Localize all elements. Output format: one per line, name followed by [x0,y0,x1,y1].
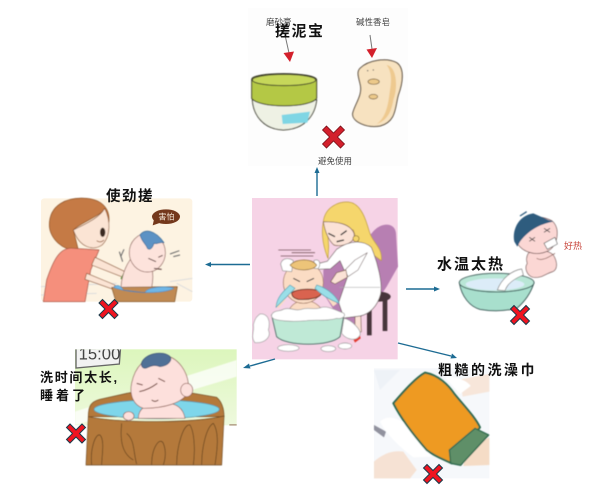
panel: water too hot [437,212,582,324]
icon: alkaline soap bar [353,60,402,126]
icon: red cross, long bath [66,424,86,443]
illustration: baby asleep in wooden tub [75,344,237,465]
speech bubble: scared [152,209,180,225]
illustration: orange bath mitt on arm [374,368,489,478]
text: exfoliating cream label: 磨砂膏 [266,17,292,27]
icon: red cross, scrubbing [99,300,118,318]
text: so hot: 好热 [564,240,582,251]
arrow: left to scrubbing panel [205,262,250,267]
panel: scrubbing too hard [41,187,192,318]
illustration: baby jumping out of hot basin [459,212,557,311]
text: rough washcloth: 粗糙的洗澡巾 [438,362,537,378]
arrow: lower left to long bath panel [243,359,275,368]
speech bubble: scared: 害怕 [158,211,174,221]
panel: products to avoid [248,8,408,166]
text: alkaline soap label: 碱性香皂 [356,17,390,27]
arrow: up to products [314,167,320,196]
panel: central crying baby being scrubbed [252,198,398,359]
icon: exfoliating cream jar [252,74,317,130]
heading: body scrub: 搓泥宝 [275,22,325,40]
text: water too hot: 水温太热 [437,256,505,273]
text: bathing too long, fell asleep: 洗时间太长, [40,370,119,385]
icon: red pointer to soap [366,35,377,58]
clock: 15:00 [79,344,120,363]
illustration: mother scrubbing baby [41,198,192,302]
clock [75,349,122,369]
text: avoid using: 避免使用 [318,156,352,166]
arrow: right to hot water panel [406,286,440,292]
text: bathing too long, fell asleep: 睡着了 [40,388,88,403]
icon: red pointer to jar [284,35,294,62]
icon: red cross, hot water [510,306,530,324]
arrow: lower right to towel panel [398,343,457,358]
heading: scrubbing hard: 使劲搓 [106,187,154,205]
icon: red cross, products [322,126,344,148]
panel: rough washcloth [374,362,537,484]
icon: red cross, washcloth [424,464,442,484]
text: bathing too long, fell asleep [40,370,119,403]
panel: bathing too long [40,344,237,465]
